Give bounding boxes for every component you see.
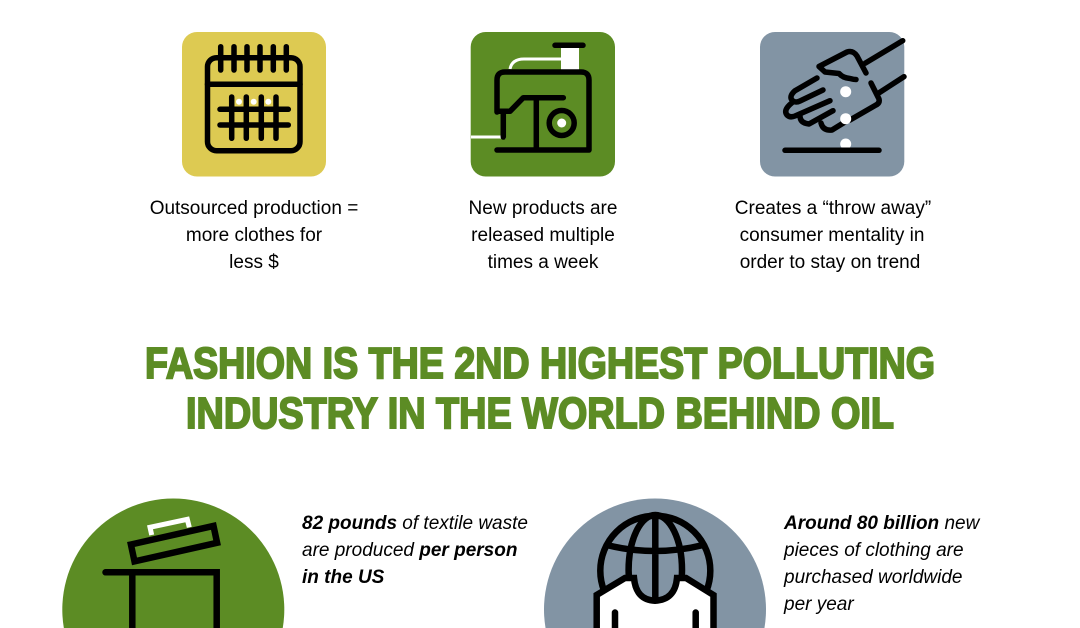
caption: throw away mentality: Creates a “throw away”	[735, 198, 931, 219]
caption: throw away mentality	[735, 198, 931, 273]
caption: throw away mentality: consumer mentality in	[740, 225, 924, 246]
caption: new products: times a week	[488, 252, 599, 273]
caption: new products	[469, 198, 617, 273]
text: textile waste fact	[302, 513, 528, 588]
caption: new products: New products are	[469, 198, 617, 219]
text: clothing purchases fact	[783, 513, 981, 615]
caption: outsourced production	[150, 198, 358, 273]
heading	[145, 339, 935, 438]
caption: throw away mentality: order to stay on trend	[740, 252, 920, 273]
icon: sewing machine	[471, 32, 615, 176]
heading: FASHION IS THE 2ND HIGHEST POLLUTING	[145, 339, 935, 388]
text: textile waste fact: are produced per person	[302, 540, 517, 561]
icon: trash bin in green circle	[62, 499, 284, 628]
icon: hand dropping items	[760, 32, 904, 176]
text: clothing purchases fact: per year	[783, 594, 854, 615]
text: clothing purchases fact: purchased worldwide	[783, 567, 962, 588]
text: textile waste fact: in the US	[302, 567, 385, 588]
caption: outsourced production: more clothes for	[186, 225, 323, 246]
text: clothing purchases fact: Around 80 billion new	[783, 513, 981, 534]
icon: person with globe head in grey circle	[544, 499, 766, 628]
caption: outsourced production: less $	[229, 252, 279, 273]
caption: outsourced production: Outsourced production =	[150, 198, 358, 219]
text: clothing purchases fact: pieces of clothing are	[783, 540, 964, 561]
heading: INDUSTRY IN THE WORLD BEHIND OIL	[186, 389, 894, 438]
icon: calendar	[182, 32, 326, 176]
caption: new products: released multiple	[471, 225, 615, 246]
text: textile waste fact: 82 pounds of textile waste	[302, 513, 528, 534]
